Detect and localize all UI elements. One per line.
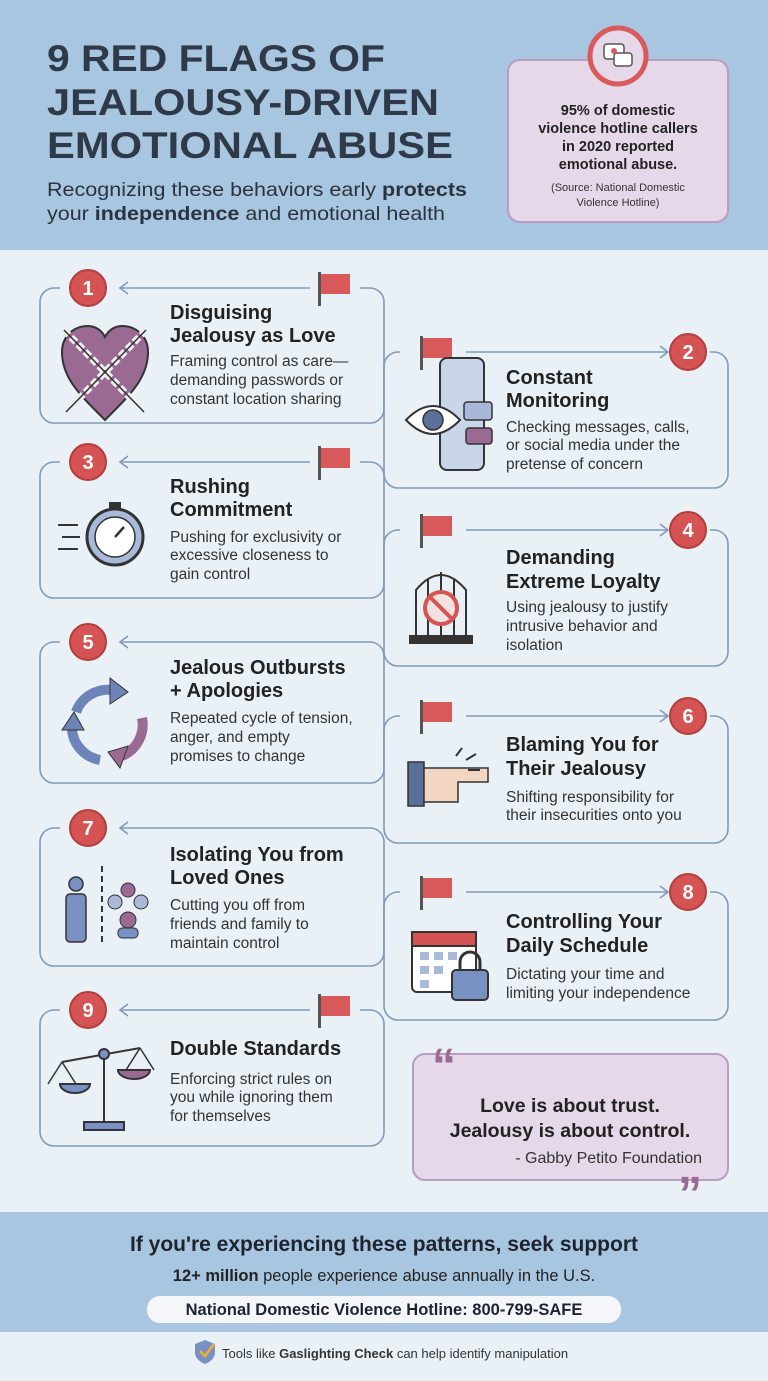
card texts: anger, and empty <box>170 729 290 746</box>
card texts: Shifting responsibility for <box>506 789 674 806</box>
footer band: If you're experiencing these patterns, seek support <box>130 1233 638 1256</box>
card texts: intrusive behavior and <box>506 618 658 635</box>
card texts: Cutting you off from <box>170 897 305 914</box>
gaps in top borders <box>60 282 710 1016</box>
stat box: in 2020 reported <box>562 139 674 155</box>
icon: calendar lock <box>412 932 488 1000</box>
card texts: Checking messages, calls, <box>506 419 690 436</box>
number badges: 2 <box>682 342 694 364</box>
icon: scales <box>48 1048 154 1130</box>
card texts: Daily Schedule <box>506 935 648 957</box>
card texts: Isolating You from <box>170 844 344 866</box>
stat box: emotional abuse. <box>559 157 677 173</box>
stat box: 95% of domestic <box>561 103 675 119</box>
quote box: Jealousy is about control. <box>450 1120 690 1142</box>
title: JEALOUSY-DRIVEN <box>47 82 439 123</box>
card texts <box>170 302 690 1125</box>
stat box: violence hotline callers <box>538 121 698 137</box>
flags <box>318 272 452 1028</box>
card texts: Commitment <box>170 499 293 521</box>
footer note <box>195 1340 568 1364</box>
card texts: Double Standards <box>170 1038 341 1060</box>
icon: isolated person <box>66 866 148 946</box>
subtitle <box>47 179 467 225</box>
quote box: - Gabby Petito Foundation <box>515 1150 702 1167</box>
number badges: 5 <box>82 632 94 654</box>
quote box: “ <box>432 1040 456 1093</box>
arrows <box>120 282 668 1016</box>
number badges: 3 <box>82 452 94 474</box>
card texts: maintain control <box>170 935 279 952</box>
icon: cage <box>410 572 472 643</box>
card texts: Enforcing strict rules on <box>170 1071 332 1088</box>
number badges <box>70 270 706 1028</box>
footer band: 12+ million people experience abuse annually in the U.S. <box>173 1267 595 1285</box>
card texts: Blaming You for <box>506 734 659 756</box>
card texts: friends and family to <box>170 916 309 933</box>
card texts: their insecurities onto you <box>506 807 682 824</box>
card texts: Dictating your time and <box>506 966 665 983</box>
card texts: excessive closeness to <box>170 547 329 564</box>
stat box: (Source: National Domestic <box>551 182 685 194</box>
card texts: + Apologies <box>170 680 283 702</box>
card texts: demanding passwords or <box>170 372 343 389</box>
card texts: Demanding <box>506 547 615 569</box>
card texts: for themselves <box>170 1108 271 1125</box>
card texts: promises to change <box>170 748 305 765</box>
number badges: 1 <box>82 278 94 300</box>
card texts: Pushing for exclusivity or <box>170 529 341 546</box>
icon: cycle arrows <box>62 678 143 768</box>
card texts: Controlling Your <box>506 911 662 933</box>
footer band: National Domestic Violence Hotline: 800-799-SAFE <box>186 1301 582 1319</box>
icon: chat <box>590 28 646 84</box>
card texts: pretense of concern <box>506 456 643 473</box>
card texts: Using jealousy to justify <box>506 599 668 616</box>
subtitle: Recognizing these behaviors early protects <box>47 179 467 201</box>
stat box: Violence Hotline) <box>577 197 659 209</box>
title: EMOTIONAL ABUSE <box>47 125 453 166</box>
card texts: Framing control as care— <box>170 353 349 370</box>
icon: phone and eye <box>406 358 492 470</box>
number badges: 6 <box>682 706 694 728</box>
title <box>47 38 453 166</box>
icon: chained heart <box>62 326 148 420</box>
number badges: 4 <box>682 520 694 542</box>
icon: pointing hand <box>408 748 488 806</box>
card texts: gain control <box>170 566 250 583</box>
card texts: Monitoring <box>506 390 609 412</box>
card texts: Loved Ones <box>170 867 284 889</box>
title: 9 RED FLAGS OF <box>47 38 385 79</box>
card texts: Jealous Outbursts <box>170 657 346 679</box>
quote box <box>413 1040 728 1221</box>
number badges: 8 <box>682 882 694 904</box>
quote box: Love is about trust. <box>480 1095 660 1117</box>
header background <box>0 0 768 250</box>
number badges: 7 <box>82 818 94 840</box>
number badges: 9 <box>82 1000 94 1022</box>
card texts: Their Jealousy <box>506 758 647 780</box>
footer note: Tools like Gaslighting Check can help identify manipulation <box>222 1346 568 1361</box>
icon: stopwatch <box>58 502 143 565</box>
card texts: Constant <box>506 367 593 389</box>
card texts: Repeated cycle of tension, <box>170 710 353 727</box>
quote box: ” <box>678 1168 702 1221</box>
footer band <box>0 1212 768 1332</box>
card texts: you while ignoring them <box>170 1089 333 1106</box>
card texts: Extreme Loyalty <box>506 571 661 593</box>
card texts: isolation <box>506 637 563 654</box>
card texts: Rushing <box>170 476 250 498</box>
card texts: Jealousy as Love <box>170 325 336 347</box>
stat box <box>508 28 728 222</box>
subtitle: your independence and emotional health <box>47 203 445 225</box>
card texts: Disguising <box>170 302 272 324</box>
card texts: constant location sharing <box>170 391 341 408</box>
card texts: or social media under the <box>506 437 680 454</box>
card texts: limiting your independence <box>506 985 690 1002</box>
